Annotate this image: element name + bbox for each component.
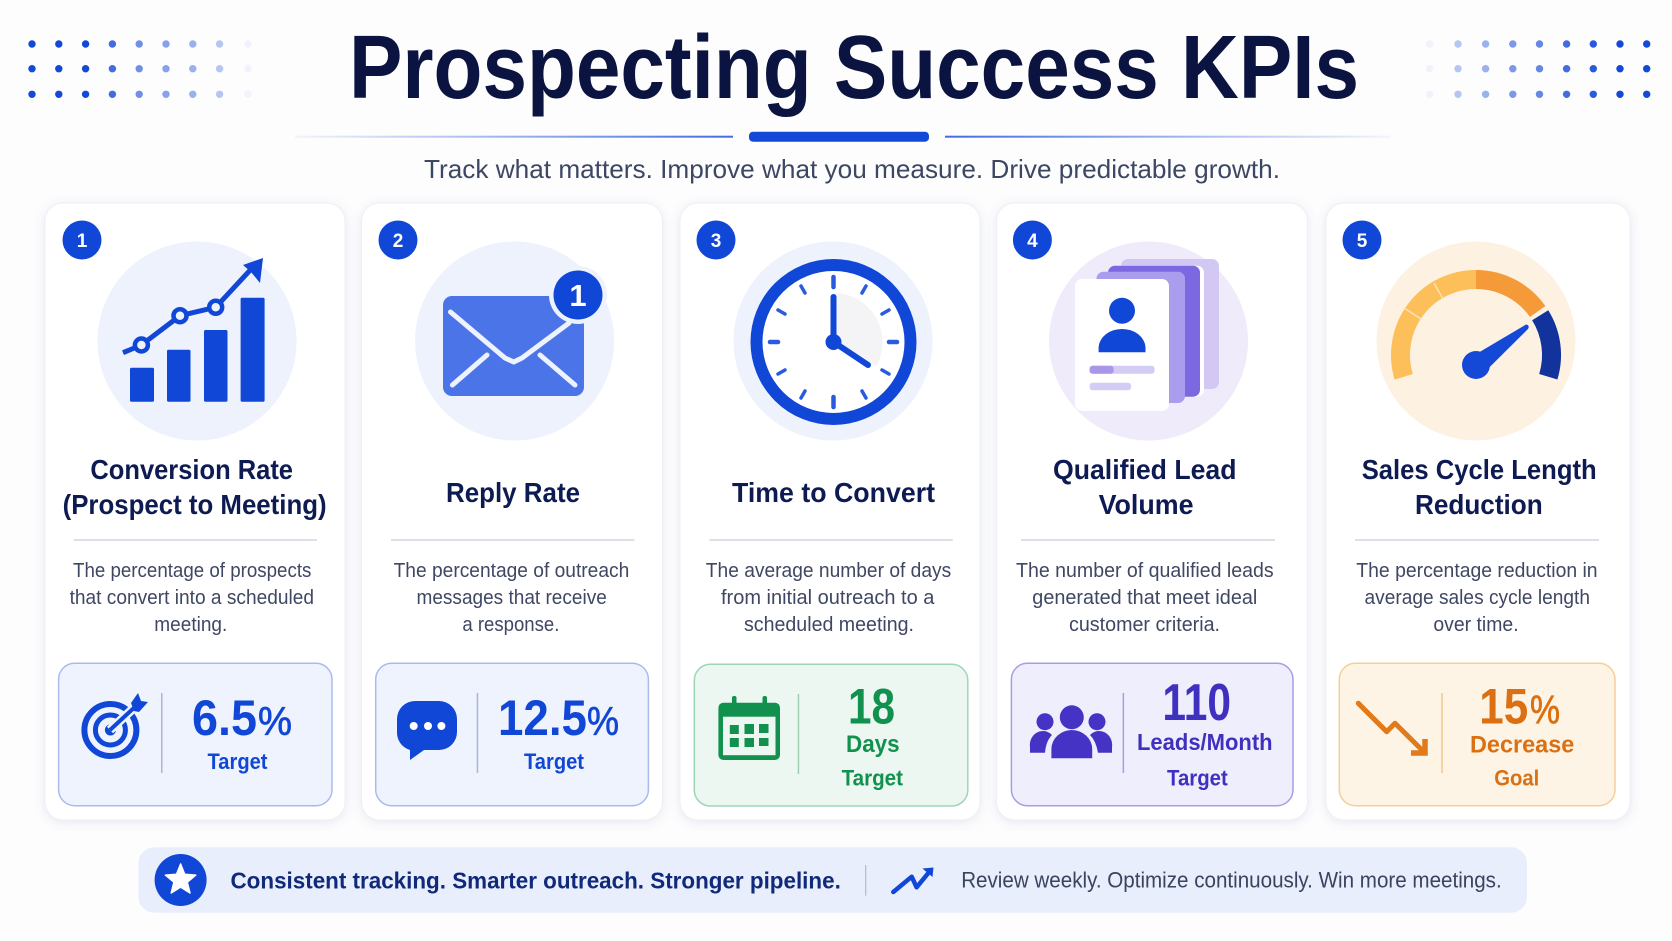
heading: Time to Convert [732,477,935,508]
description [706,560,951,636]
value [192,690,292,774]
title rule [295,132,1390,142]
value: Target [208,749,268,774]
description: The percentage of outreach [394,560,629,582]
panel: qualified lead volume [996,203,1308,820]
description [70,560,314,636]
description [394,560,629,636]
panel: sales cycle length reduction [1326,203,1630,820]
heading: (Prospect to Meeting) [63,489,327,520]
card background [362,203,662,820]
value: % [258,700,292,744]
icon: envelope: 1 [569,278,587,313]
icon: envelope [415,242,614,440]
icon: down trend arrow [1358,703,1425,753]
icon: trend up arrow [893,868,934,892]
heading: Qualified Lead [1053,454,1236,485]
description: over time. [1433,614,1519,636]
card background [1326,203,1630,820]
banner message: Consistent tracking. Smarter outreach. Stronger pipeline. [230,867,841,893]
description [1356,560,1598,636]
value: Target [842,766,904,791]
icon: target [84,693,148,756]
number badge 1 [62,220,102,260]
value: Leads/Month [1137,729,1273,755]
icon: calendar [718,696,780,760]
heading: Reply Rate [446,477,580,508]
number badge 2 [378,220,418,260]
heading [1362,454,1597,520]
value: Decrease [1470,732,1574,759]
number badge 4: 4 [1027,231,1038,252]
card background [680,203,980,820]
icon: lead cards [1049,242,1248,440]
decorative dots right [1426,40,1650,98]
icon: people [1030,705,1112,758]
heading [1053,454,1236,520]
subtitle: Track what matters. Improve what you measure. Drive predictable growth. [424,154,1280,184]
number badge 5: 5 [1357,231,1368,252]
stat box: 15% decrease goal [1339,663,1615,806]
banner secondary message: Review weekly. Optimize continuously. Win more meetings. [961,867,1502,892]
heading: Conversion Rate [90,454,293,485]
heading: Volume [1099,489,1194,520]
stat box: 18 days target [694,664,968,806]
icon: star [155,854,207,906]
value [1137,674,1273,791]
heading: Reduction [1415,489,1543,520]
icon: clock [734,242,932,440]
stat box: 110 leads per month target [1011,663,1293,806]
number badge 1: 1 [77,231,88,252]
description: a response. [462,614,559,636]
description: generated that meet ideal [1032,587,1257,609]
heading [63,454,327,520]
number badge 2: 2 [393,231,403,252]
title: Prospecting Success KPIs [349,18,1359,118]
description: scheduled meeting. [744,614,914,636]
description: The percentage of prospects [73,560,311,582]
card background [45,203,345,820]
description: average sales cycle length [1364,587,1590,609]
icon: gauge [1376,242,1576,440]
description: customer criteria. [1069,614,1220,636]
description: meeting. [154,614,227,636]
value: Days [846,731,900,758]
footer banner [138,847,1527,913]
description: messages that receive [416,587,607,609]
stat box: 12.5% target [376,663,648,806]
value: Goal [1494,766,1539,791]
value: Target [1167,766,1228,791]
description [1016,560,1274,636]
panel: conversion rate [45,203,345,820]
panel: time to convert [680,203,980,820]
number badge 3: 3 [711,231,721,252]
heading: Sales Cycle Length [1362,454,1597,485]
number badge 3 [696,220,736,260]
value: 6.5 [192,690,257,746]
value [1470,678,1574,791]
value: 18 [848,678,895,734]
description: The percentage reduction in [1356,560,1598,582]
value: % [1530,688,1560,732]
description: The average number of days [706,560,951,582]
card background [996,203,1308,820]
panel: reply rate [362,203,662,820]
value [842,678,904,791]
number badge 5 [1342,220,1382,260]
icon: growth chart [98,242,296,440]
value: 15 [1479,678,1528,734]
description: The number of qualified leads [1016,560,1274,582]
description: from initial outreach to a [721,587,935,609]
number badge 4 [1013,220,1052,260]
value: Target [524,749,585,774]
value [498,690,619,774]
value: 12.5 [498,690,587,746]
decorative dots left [28,40,252,98]
value: % [587,700,619,744]
stat box: 6.5% target [59,663,332,806]
description: that convert into a scheduled [70,587,314,609]
value: 110 [1162,674,1231,732]
icon: chat bubble [397,701,457,760]
